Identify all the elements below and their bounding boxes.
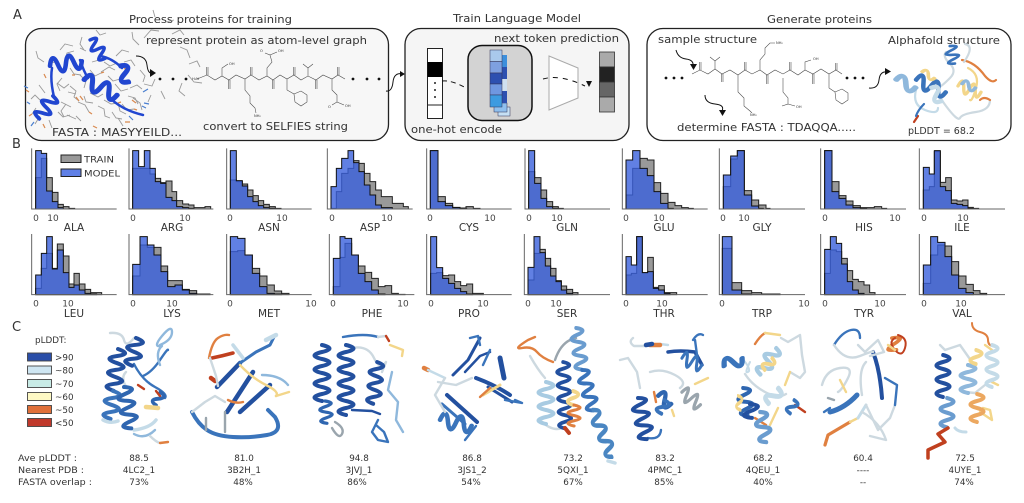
- histogram tick labels: 10: [305, 300, 317, 310]
- histogram: PHE: [329, 234, 414, 295]
- table: structure metrics: [18, 454, 981, 488]
- histogram amino acid labels: ARG: [161, 222, 183, 234]
- legend: train and model: MODEL: [84, 170, 120, 180]
- histogram amino acid labels: ASN: [258, 222, 280, 234]
- molecule: generated peptide: OH: [813, 57, 819, 61]
- table: structure metrics: --: [860, 478, 866, 488]
- legend: train and model: [61, 155, 120, 180]
- molecule: peptide chain: OH: [229, 62, 235, 66]
- histogram: LYS: [129, 234, 213, 295]
- table: structure metrics: 81.0: [234, 454, 254, 464]
- panel label B: B: [12, 137, 21, 152]
- text: Alphafold structure: Alphafold structure: [888, 35, 1000, 47]
- molecule: generated peptide: [692, 41, 848, 117]
- histogram tick labels: 0: [623, 300, 629, 310]
- legend: pLDDT colour scale: ~60: [55, 393, 74, 403]
- dots left of molecule: [665, 77, 683, 79]
- histogram tick labels: 0: [822, 214, 828, 224]
- histogram: ILE: [919, 148, 1005, 209]
- histogram tick labels: 10: [397, 300, 409, 310]
- histogram: PRO: [427, 234, 512, 295]
- panel: amino acid histograms columns one to three plus row labels: [32, 148, 312, 295]
- table: structure metrics: 74%: [954, 478, 974, 488]
- molecule: peptide chain: OH: [345, 104, 351, 108]
- histogram: GLU: [622, 148, 708, 209]
- histogram amino acid labels: ASP: [360, 222, 380, 234]
- molecule: peptide chain: OH: [278, 49, 284, 53]
- histogram: TRP: [719, 234, 805, 295]
- histogram: SER: [524, 234, 610, 295]
- histogram tick labels: 10: [957, 214, 969, 224]
- one-hot input bar: [428, 48, 442, 118]
- legend: pLDDT colour scale: ~50: [55, 406, 74, 416]
- molecule: peptide chain: NH₂: [254, 114, 261, 118]
- network block with stacked layers: [468, 46, 532, 120]
- histogram: LEU: [32, 234, 117, 295]
- text: next token prediction: next token prediction: [494, 33, 619, 45]
- dots after molecule: [352, 78, 380, 80]
- table: structure metrics: 85%: [654, 478, 674, 488]
- histogram amino acid labels: GLY: [752, 222, 772, 234]
- legend: pLDDT colour scale: ~70: [55, 380, 74, 390]
- molecule: peptide chain: O: [260, 49, 263, 53]
- protein 9: [928, 323, 998, 458]
- histogram tick labels: 0: [822, 300, 828, 310]
- histogram amino acid labels: TYR: [853, 308, 874, 320]
- icon: blue atom-level protein structure: [24, 10, 202, 128]
- histogram: ASP: [327, 148, 413, 209]
- arrow: molecule to alphafold: [869, 68, 891, 88]
- table: structure metrics: ----: [857, 466, 869, 476]
- histogram: TYR: [821, 234, 906, 295]
- protein 6: [620, 334, 708, 441]
- histogram tick labels: 10: [381, 214, 393, 224]
- table: structure metrics: FASTA overlap :: [18, 478, 92, 488]
- histogram tick labels: 10: [551, 214, 563, 224]
- panel label C: C: [12, 320, 21, 335]
- histogram tick labels: 10: [550, 300, 562, 310]
- histogram amino acid labels: TRP: [751, 308, 772, 320]
- histogram amino acid labels: [64, 222, 972, 320]
- table: structure metrics: 54%: [461, 478, 481, 488]
- histogram tick labels: [33, 214, 969, 310]
- histogram amino acid labels: PHE: [362, 308, 382, 320]
- histogram tick labels: 10: [955, 300, 967, 310]
- legend: pLDDT colour scale: [28, 336, 74, 429]
- histogram tick labels: 10: [484, 214, 496, 224]
- molecule: generated peptide: NH₂: [776, 41, 783, 45]
- protein 2: [192, 335, 289, 437]
- histogram amino acid labels: PRO: [458, 308, 480, 320]
- histogram: GLY: [719, 148, 805, 209]
- molecule: peptide chain: H₂N: [192, 77, 199, 81]
- histogram: ASN: [227, 148, 312, 209]
- table: structure metrics: Ave pLDDT :: [18, 454, 77, 464]
- table: structure metrics: 86.8: [462, 454, 482, 464]
- table: structure metrics: 4QEU_1: [746, 466, 780, 476]
- histogram tick labels: 10: [166, 300, 178, 310]
- histogram: VAL: [919, 234, 1005, 295]
- table: structure metrics: 73.2: [563, 454, 583, 464]
- histogram tick labels: 0: [921, 214, 927, 224]
- table: structure metrics: 40%: [753, 478, 773, 488]
- histogram: ALA: [32, 148, 117, 209]
- table: structure metrics: 60.4: [853, 454, 873, 464]
- histogram amino acid labels: VAL: [952, 308, 972, 320]
- histogram tick labels: 10: [874, 300, 886, 310]
- table: structure metrics: 4UYE_1: [949, 466, 981, 476]
- histogram tick labels: 0: [33, 300, 39, 310]
- histogram: MET: [227, 234, 312, 295]
- text: FASTA sequence: FASTA : MASYYEILD...: [52, 127, 182, 139]
- molecule: peptide chain: [192, 49, 351, 118]
- table: structure metrics: 72.5: [955, 454, 975, 464]
- histogram amino acid labels: THR: [652, 308, 675, 320]
- histogram: CYS: [427, 148, 512, 209]
- histogram: ARG: [129, 148, 213, 209]
- histogram tick labels: 10: [47, 214, 59, 224]
- histogram tick labels: 0: [130, 300, 136, 310]
- text: determine FASTA: determine FASTA : TDAQQA.....: [677, 122, 856, 134]
- histogram tick labels: 10: [276, 214, 288, 224]
- panel: amino acid histograms columns eight to ten: [719, 148, 1005, 295]
- histogram tick labels: 0: [623, 214, 629, 224]
- panel: train language model: [405, 28, 629, 140]
- histogram tick labels: 0: [227, 214, 233, 224]
- table: structure metrics: 3JVJ_1: [346, 466, 372, 476]
- histogram tick labels: 0: [130, 214, 136, 224]
- table: structure metrics: 48%: [233, 478, 253, 488]
- histogram amino acid labels: ILE: [954, 222, 970, 234]
- table: structure metrics: 68.2: [753, 454, 773, 464]
- histogram tick labels: 10: [477, 300, 489, 310]
- protein 3: [314, 335, 403, 442]
- histogram: THR: [622, 234, 708, 295]
- output probability bar: [600, 52, 614, 112]
- protein 8: [822, 330, 906, 445]
- histogram tick labels: 0: [329, 214, 335, 224]
- arrow: dashed through decoder: [543, 78, 592, 87]
- histogram tick labels: 10: [889, 214, 901, 224]
- legend: pLDDT colour scale: >90: [55, 354, 74, 364]
- table: structure metrics: 5QXI_1: [557, 466, 589, 476]
- table: structure metrics: 4PMC_1: [648, 466, 682, 476]
- table: structure metrics: Nearest PDB :: [18, 466, 84, 476]
- table: structure metrics: 67%: [563, 478, 583, 488]
- histogram amino acid labels: GLN: [556, 222, 578, 234]
- dots right of molecule: [846, 77, 864, 79]
- histogram tick labels: 10: [798, 300, 810, 310]
- histogram amino acid labels: CYS: [459, 222, 479, 234]
- protein 1: [103, 329, 172, 443]
- arrow: input to network: [442, 81, 476, 89]
- dots before molecule: [159, 78, 187, 80]
- histogram: GLN: [525, 148, 610, 209]
- protein 7: [721, 333, 805, 444]
- table: structure metrics: 3B2H_1: [227, 466, 261, 476]
- histogram tick labels: 0: [921, 300, 927, 310]
- molecule: generated peptide: OH: [796, 105, 802, 109]
- table: structure metrics: 73%: [129, 478, 149, 488]
- histogram amino acid labels: LEU: [64, 308, 84, 320]
- heading: generate proteins: Generate proteins: [767, 14, 872, 26]
- histogram amino acid labels: ALA: [64, 222, 85, 234]
- molecule: peptide chain: O: [328, 105, 331, 109]
- histogram amino acid labels: HIS: [855, 222, 873, 234]
- text: sample structure: sample structure: [658, 34, 757, 46]
- table: structure metrics: 3JS1_2: [457, 466, 487, 476]
- arrow: panel one to panel two: [386, 71, 405, 91]
- histogram tick labels: 10: [656, 300, 668, 310]
- histogram tick labels: 0: [428, 300, 434, 310]
- legend: train and model: TRAIN: [83, 156, 114, 166]
- legend: pLDDT colour scale: ~80: [55, 366, 74, 376]
- table: structure metrics: 88.5: [129, 454, 149, 464]
- histogram tick labels: 10: [653, 214, 665, 224]
- histogram tick labels: 10: [179, 214, 191, 224]
- protein 5: [518, 327, 617, 463]
- heading: train language model: Train Language Model: [452, 13, 581, 25]
- histogram tick labels: 10: [62, 300, 74, 310]
- legend: pLDDT colour scale: <50: [55, 419, 74, 429]
- panel label A: A: [13, 8, 22, 23]
- panel: generate proteins: [647, 28, 1011, 140]
- histogram amino acid labels: SER: [557, 308, 577, 320]
- panel: process proteins for training: [24, 10, 388, 140]
- text: one-hot encode: one-hot encode: [411, 124, 502, 136]
- legend: pLDDT colour scale: pLDDT:: [35, 336, 66, 346]
- histogram tick labels: 10: [738, 214, 750, 224]
- text: represent protein as graph: represent protein as atom-level graph: [146, 35, 367, 47]
- decoder trapezoid: [549, 56, 578, 110]
- histogram tick labels: 0: [719, 300, 725, 310]
- arrow: sample structure: [676, 50, 697, 70]
- histogram tick labels: 0: [33, 214, 39, 224]
- panel: amino acid histograms columns four to seven: [327, 148, 708, 295]
- text: pLDDT score: pLDDT = 68.2: [908, 126, 975, 137]
- histogram tick labels: 0: [427, 214, 433, 224]
- arrow: determine FASTA: [705, 95, 726, 116]
- heading: process proteins: Process proteins for training: [129, 14, 292, 26]
- histogram tick labels: 0: [720, 214, 726, 224]
- histogram tick labels: 0: [227, 300, 233, 310]
- histogram amino acid labels: MET: [258, 308, 281, 320]
- text: convert to SELFIES: convert to SELFIES string: [203, 121, 348, 133]
- table: structure metrics: 94.8: [349, 454, 369, 464]
- histogram amino acid labels: GLU: [653, 222, 675, 234]
- histogram amino acid labels: LYS: [163, 308, 181, 320]
- table: structure metrics: 86%: [347, 478, 367, 488]
- histogram tick labels: 0: [526, 214, 532, 224]
- molecule: generated peptide: NH₂: [750, 113, 757, 117]
- arrow: protein to molecule: [136, 56, 156, 77]
- histogram tick labels: 0: [330, 300, 336, 310]
- histogram: HIS: [821, 148, 906, 209]
- table: structure metrics: 4LC2_1: [123, 466, 155, 476]
- icon: alphafold predicted protein: [894, 44, 996, 122]
- table: structure metrics: 83.2: [655, 454, 675, 464]
- protein 4: [424, 336, 522, 440]
- histogram tick labels: 0: [525, 300, 531, 310]
